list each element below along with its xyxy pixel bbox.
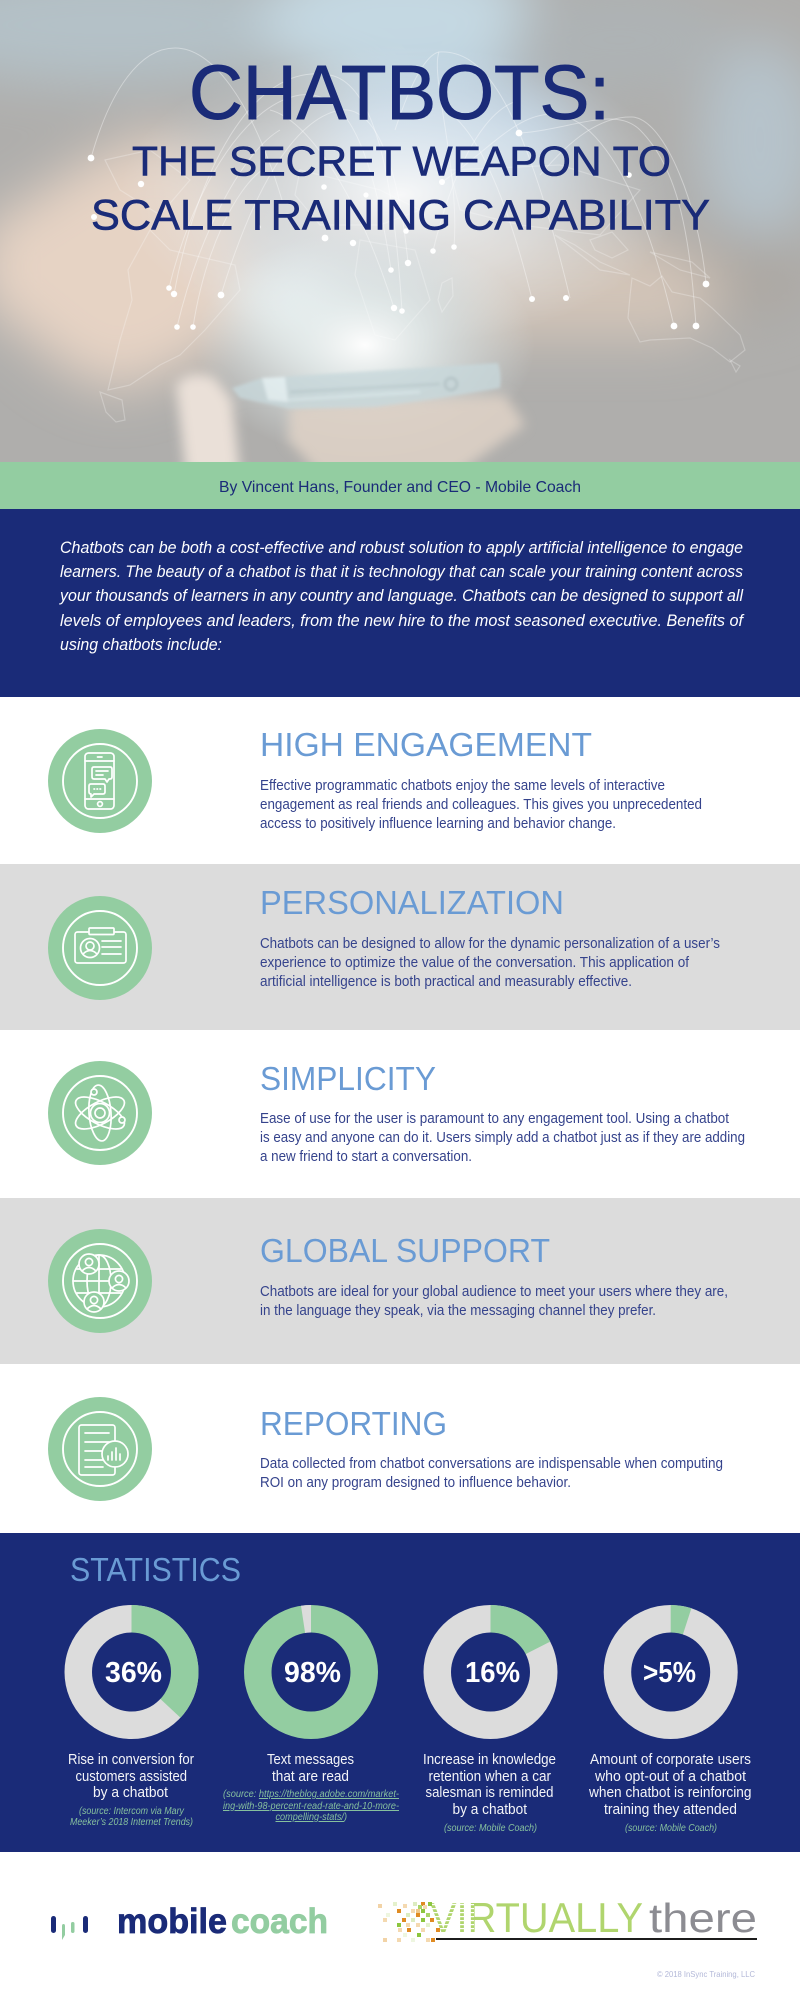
donut chart: >5% [604,1605,738,1739]
panel: statistics [0,1533,800,1852]
icon: report document with chart [48,1397,152,1501]
text: reporting body: Data collected from chatbot conversations are indispensable when computing [260,1456,723,1472]
title: SCALE TRAINING CAPABILITY [91,192,710,240]
text: reporting body [260,1456,723,1491]
caption: 36%: customers assisted [76,1769,187,1785]
panel: global support [0,1198,800,1364]
logo: mobile coach [51,1902,328,1941]
logo: virtually there: there [649,1895,757,1941]
copyright: © 2018 InSync Training, LLC [657,1969,755,1979]
text: personalization body: Chatbots can be designed to allow for the dynamic personalization of a user’s [260,936,720,952]
text: high engagement body: engagement as real friends and colleagues. This gives you unprecedented [260,797,702,813]
caption: 36%: Rise in conversion for [68,1752,194,1768]
heading: simplicity: SIMPLICITY [260,1060,436,1097]
icon: globe with people [48,1229,152,1333]
caption: 98%: Text messages [267,1752,354,1768]
icon: id badge [48,896,152,1000]
text: simplicity body: is easy and anyone can do it. Users simply add a chatbot just as if they are adding [260,1130,745,1146]
caption: 16% [423,1752,556,1834]
text: global support body [260,1284,728,1319]
text: personalization body: experience to optimize the value of the conversation. This application of [260,955,690,971]
caption: >5% [588,1752,752,1834]
caption: 98%: compelling-stats/) [276,1812,347,1823]
donut chart: 98% [244,1605,378,1739]
donut chart: 36%: 36% [105,1657,162,1689]
panel: simplicity [0,1030,800,1198]
icon: phone with chat bubbles [48,729,152,833]
donut chart: 16%: 16% [465,1657,520,1689]
heading: personalization: PERSONALIZATION [260,884,564,921]
caption: 98%: (source: https://theblog.adobe.com/market- [223,1789,400,1800]
text: global support body: in the language they speak, via the messaging channel they prefer. [260,1303,656,1319]
heading: statistics: STATISTICS [70,1551,241,1588]
caption: 98%: that are read [272,1769,349,1785]
network nodes [88,130,709,330]
caption: 98% [223,1752,400,1823]
donut chart: 98%: 98% [284,1657,341,1689]
heading: high engagement: HIGH ENGAGEMENT [260,726,592,763]
panel: high engagement [0,697,800,864]
intro panel: levels of employees and leaders, from the new hire to the most seasoned executive. Benefits of [60,612,745,630]
panel: personalization [0,864,800,1030]
text: simplicity body: Ease of use for the user is paramount to any engagement tool. Using a chatbot [260,1111,729,1127]
donut chart: 36% [64,1605,199,1739]
caption: 36%: (source: Intercom via Mary [79,1806,185,1817]
phone [232,363,501,409]
hero photo: hand holding glowing phone [0,0,800,475]
text: high engagement body: access to positively influence learning and behavior change. [260,816,616,832]
logo: virtually there: VIRTUALLY [430,1894,643,1941]
byline band [0,462,800,509]
title: CHATBOTS: [189,50,610,136]
byline band: By Vincent Hans, Founder and CEO - Mobile Coach [219,479,581,496]
logo: mobile coach: coach [231,1902,328,1941]
text: high engagement body: Effective programmatic chatbots enjoy the same levels of interactive [260,778,665,794]
caption: 16%: Increase in knowledge [423,1752,556,1768]
caption: 16%: by a chatbot [452,1802,527,1818]
text: high engagement body [260,778,702,832]
intro panel [0,509,800,697]
intro panel: learners. The beauty of a chatbot is that it is technology that can scale your training content across [60,563,743,581]
heading: reporting: REPORTING [260,1405,447,1442]
world map outlines [100,150,745,422]
caption: 36%: by a chatbot [93,1785,168,1801]
heading: global support: GLOBAL SUPPORT [260,1232,550,1269]
caption: 36%: Meeker’s 2018 Internet Trends) [70,1817,193,1828]
caption: 16%: (source: Mobile Coach) [444,1823,537,1834]
title [91,50,710,240]
icon: atom [48,1061,152,1165]
donut chart: >5%: >5% [643,1657,696,1689]
caption: >5%: training they attended [604,1802,737,1818]
caption: >5%: (source: Mobile Coach) [625,1823,717,1834]
text: global support body: Chatbots are ideal for your global audience to meet your users where they are, [260,1284,728,1300]
text: simplicity body: a new friend to start a conversation. [260,1149,472,1165]
text: reporting body: ROI on any program designed to influence behavior. [260,1475,571,1491]
intro panel: Chatbots can be both a cost-effective and robust solution to apply artificial intelligence to engage [60,539,743,557]
text: personalization body [260,936,720,990]
logo: virtually there [378,1894,757,1942]
network arcs [91,48,706,327]
panel: reporting [0,1364,800,1533]
title: THE SECRET WEAPON TO [132,138,671,184]
intro panel: using chatbots include: [60,636,222,654]
intro panel: your thousands of learners in any country and language. Chatbots can be designed to support all [59,587,744,605]
text: simplicity body [260,1111,745,1165]
text: personalization body: artificial intelligence is both practical and measurably effective. [260,974,632,990]
caption: 16%: salesman is reminded [426,1785,554,1801]
caption: >5%: Amount of corporate users [590,1752,751,1768]
caption: >5%: who opt-out of a chatbot [594,1769,746,1785]
caption: 36% [68,1752,194,1828]
donut chart: 16% [424,1605,558,1739]
caption: 16%: retention when a car [428,1769,551,1785]
logo: mobile coach: mobile [117,1902,227,1941]
caption: 98%: ing-with-98-percent-read-rate-and-10-more- [223,1801,400,1812]
caption: >5%: when chatbot is reinforcing [588,1785,752,1801]
